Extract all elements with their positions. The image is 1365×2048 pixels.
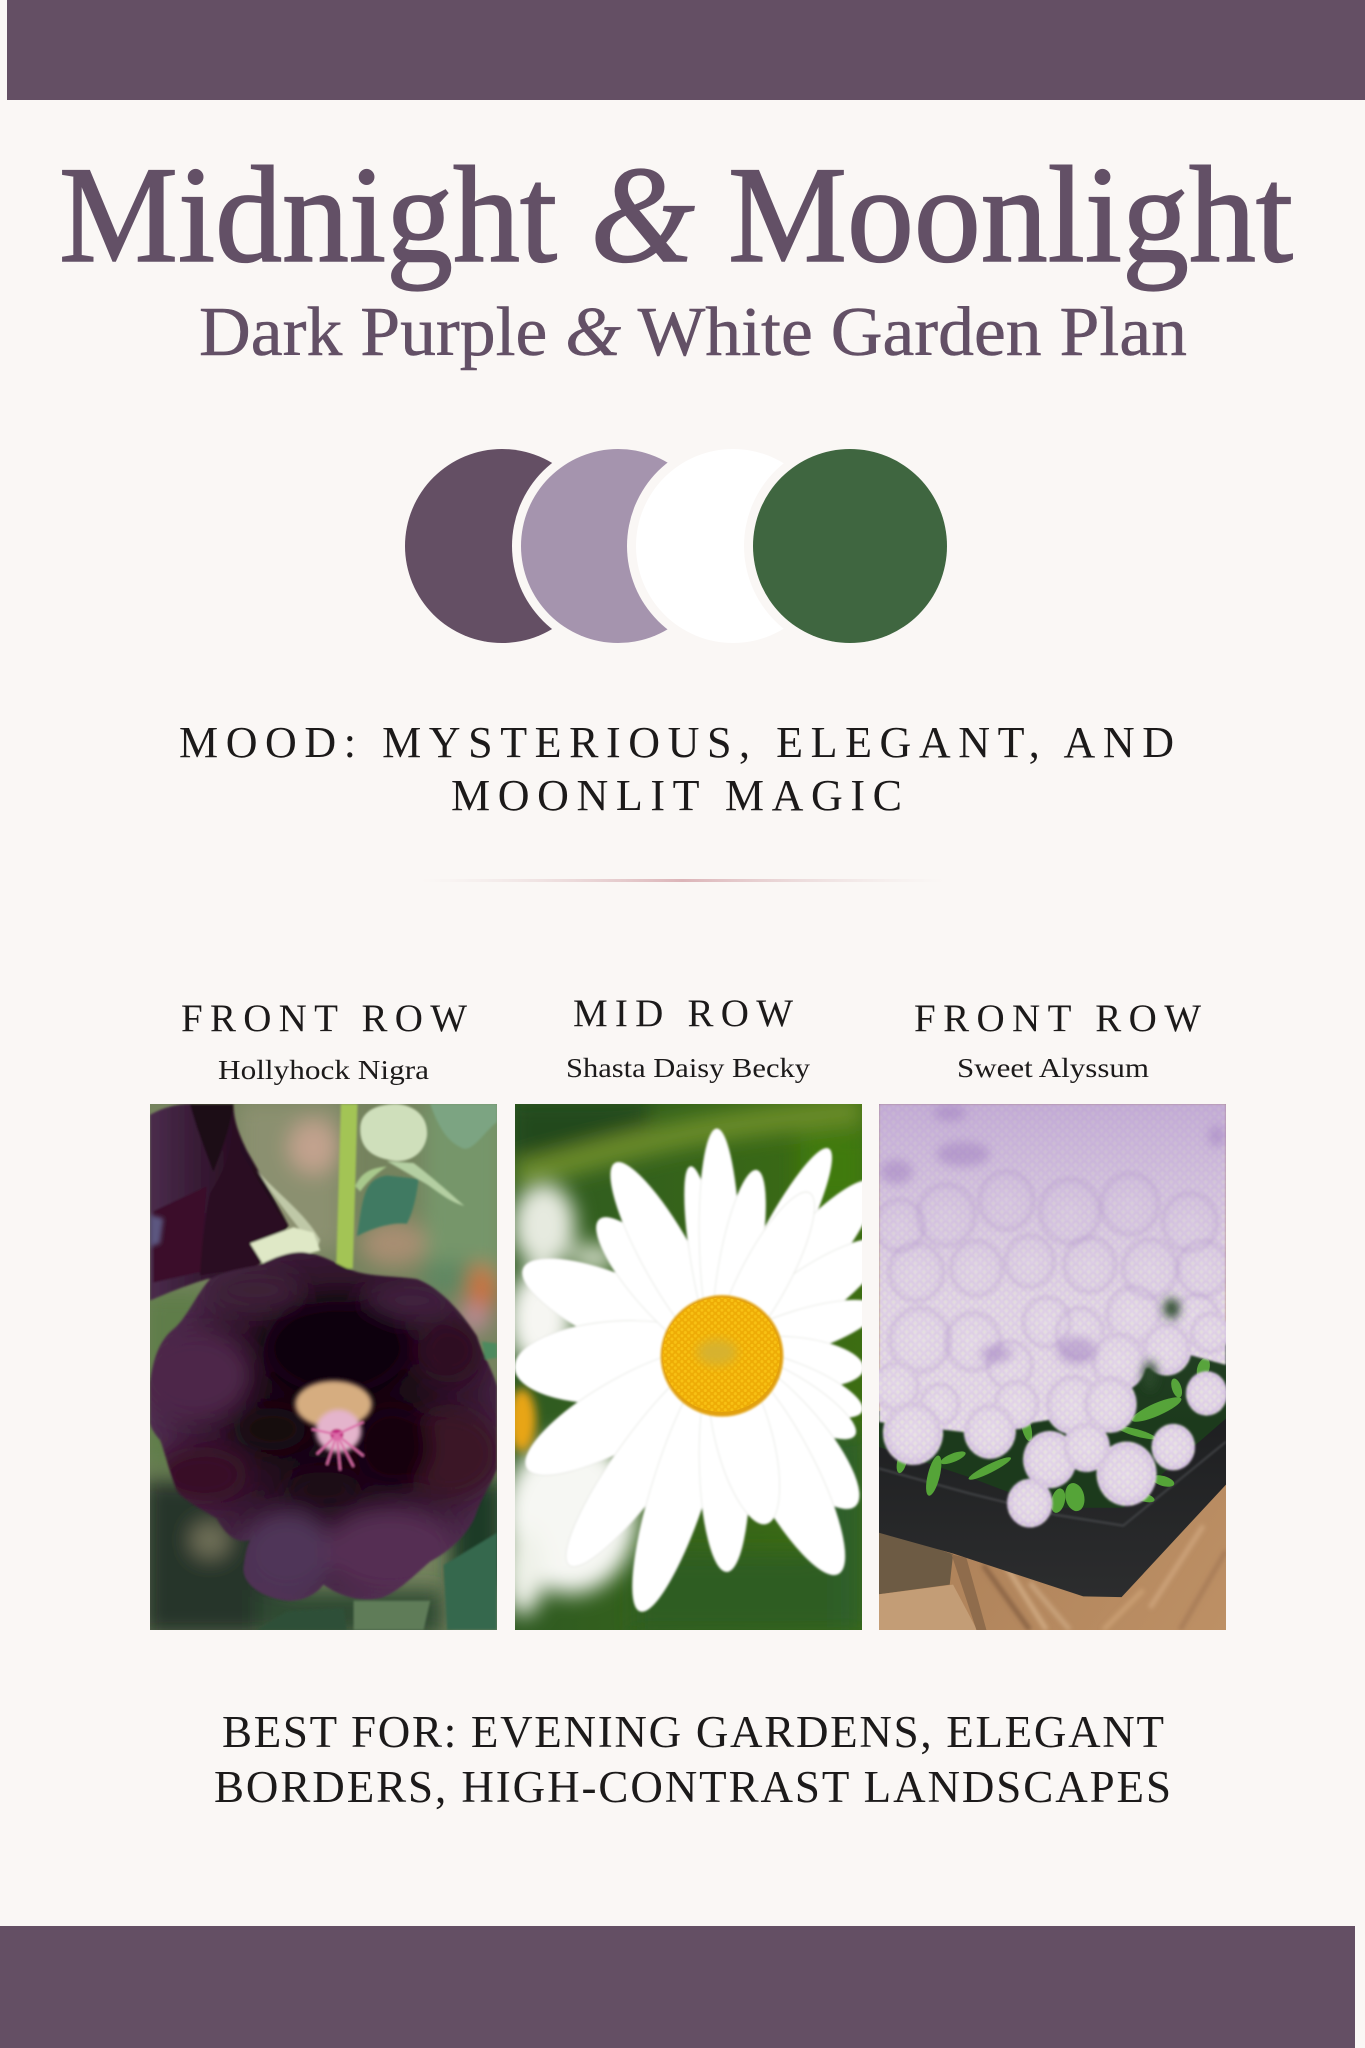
bud bbox=[360, 1104, 427, 1161]
teal leaf bbox=[357, 1175, 419, 1236]
bloom centre bbox=[295, 1381, 372, 1470]
column heading: front row hollyhock: FRONT ROW bbox=[181, 997, 467, 1040]
bottom banner bbox=[0, 1926, 1355, 2048]
wood planks and shadow bbox=[879, 1529, 953, 1594]
petals bbox=[511, 1128, 897, 1621]
flower mass bbox=[871, 1104, 1233, 1529]
upper-right leaf bbox=[430, 1104, 497, 1149]
photo: shasta daisy bbox=[515, 1104, 862, 1630]
column heading: front row hollyhock: Hollyhock Nigra bbox=[218, 1055, 429, 1085]
dark upper bloom bbox=[150, 1104, 288, 1301]
column heading: front row hollyhock bbox=[181, 997, 467, 1085]
title: Midnight & Moonlight bbox=[59, 138, 1293, 291]
best-for text: BEST FOR: EVENING GARDENS, ELEGANT bbox=[222, 1707, 1164, 1757]
column heading: front row alyssum: Sweet Alyssum bbox=[957, 1053, 1149, 1083]
column heading: front row alyssum bbox=[914, 997, 1201, 1083]
mood text bbox=[179, 718, 1174, 820]
lower leaves bbox=[444, 1533, 497, 1630]
divider bbox=[420, 879, 945, 882]
best-for text bbox=[214, 1707, 1171, 1812]
stem bbox=[336, 1104, 358, 1268]
main bloom bbox=[137, 1243, 504, 1608]
photo: sweet alyssum bbox=[879, 1104, 1226, 1630]
subtitle: Dark Purple & White Garden Plan bbox=[199, 294, 1187, 371]
column heading: mid row daisy bbox=[566, 992, 811, 1083]
colour palette circles bbox=[405, 440, 956, 652]
top banner bbox=[7, 0, 1365, 100]
mood text: MOOD: MYSTERIOUS, ELEGANT, AND bbox=[179, 718, 1174, 767]
tray bbox=[879, 1404, 1226, 1597]
photo: hollyhock nigra bbox=[150, 1104, 497, 1630]
column heading: front row alyssum: FRONT ROW bbox=[914, 997, 1201, 1040]
dark gaps between flowers bbox=[1143, 1298, 1180, 1390]
yellow disk bbox=[661, 1295, 783, 1417]
column heading: mid row daisy: Shasta Daisy Becky bbox=[566, 1053, 811, 1083]
wood grain bbox=[983, 1526, 1226, 1630]
purple tint over distant flowers bbox=[879, 1104, 1226, 1426]
best-for text: BORDERS, HIGH-CONTRAST LANDSCAPES bbox=[214, 1762, 1171, 1812]
mood text: MOONLIT MAGIC bbox=[451, 771, 902, 820]
column heading: mid row daisy: MID ROW bbox=[573, 992, 793, 1035]
blurred background daisy bbox=[504, 1183, 637, 1615]
lower flower clusters bbox=[871, 1310, 1231, 1529]
pale calyx bbox=[257, 1170, 320, 1251]
green foliage bbox=[879, 1340, 1226, 1515]
